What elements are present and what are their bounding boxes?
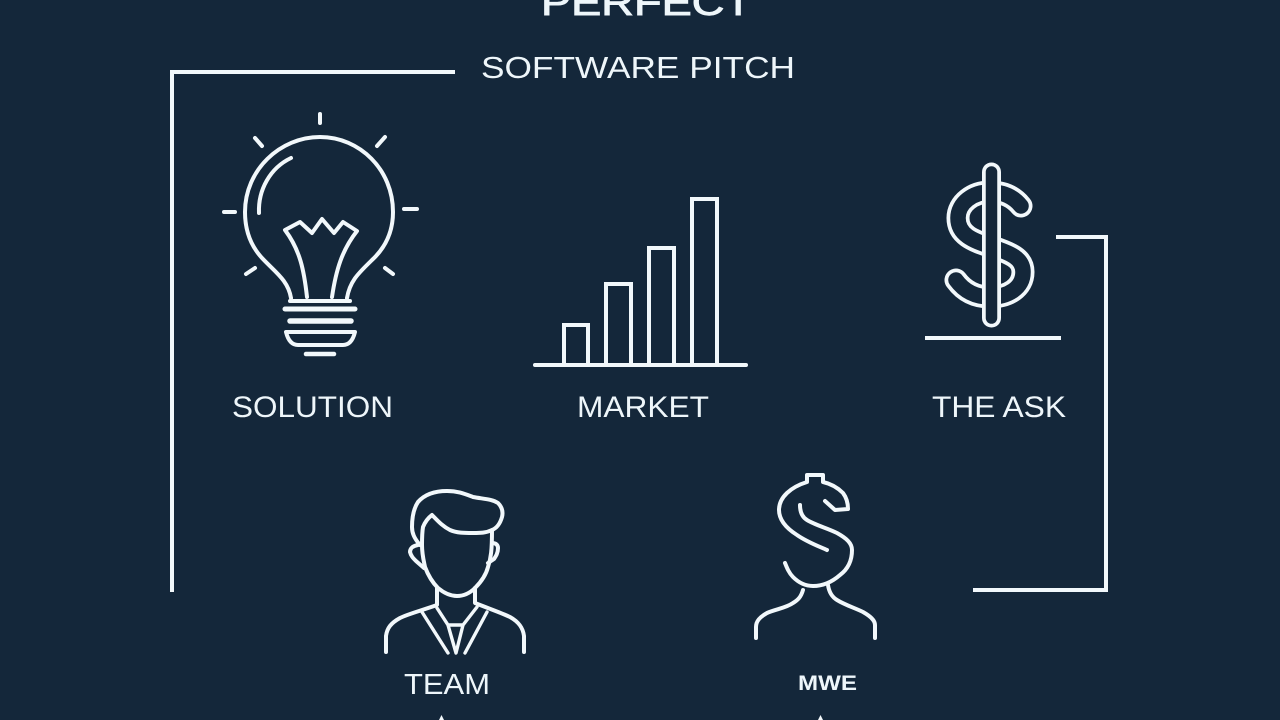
subtitle: SOFTWARE PITCH bbox=[481, 50, 795, 85]
label: garbled word: MWE bbox=[798, 672, 857, 695]
clipped mark under garbled word bbox=[818, 715, 823, 720]
label: market: MARKET bbox=[577, 391, 709, 424]
icon: team member bbox=[386, 491, 524, 653]
right bracket frame bbox=[973, 237, 1106, 590]
icon: dollar sign on a line bbox=[925, 172, 1061, 338]
label: solution: SOLUTION bbox=[232, 391, 393, 424]
clipped mark under team bbox=[439, 715, 444, 720]
label: team: TEAM bbox=[404, 669, 490, 701]
icon: light bulb bbox=[224, 114, 417, 354]
icon: person with dollar head bbox=[756, 475, 875, 638]
left bracket frame bbox=[172, 72, 455, 592]
icon: bar chart bbox=[535, 199, 746, 365]
label: the ask: THE ASK bbox=[932, 391, 1066, 424]
